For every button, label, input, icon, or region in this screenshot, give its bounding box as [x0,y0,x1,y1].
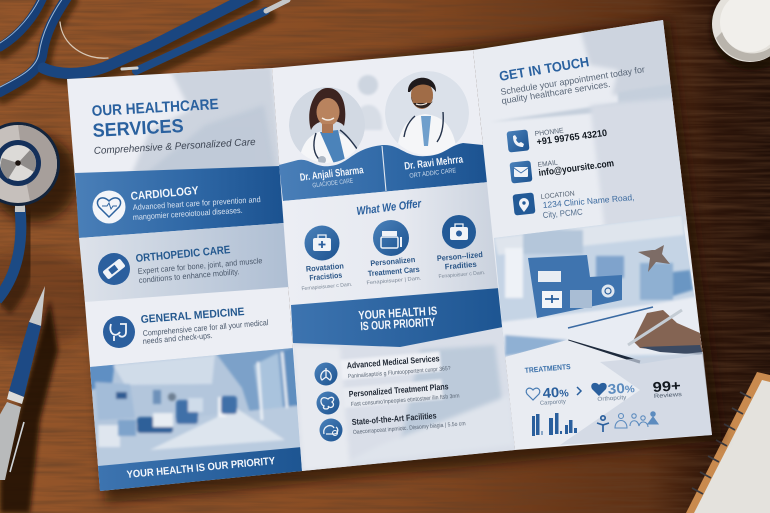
contact intro text: Schedule your appointment today for [500,64,646,97]
offer 2: Treatment Cars [367,265,421,278]
service: orthopedic care: conditions to enhance mobility. [138,267,240,285]
offer 2: Fenapioisuper | Dam. [366,276,422,286]
service: cardiology [75,166,284,238]
doctor 2 caption: Dr. Ravi Mehrra [404,153,464,173]
list item: personalized treatment plans: Personalized Treatment Plans [348,381,449,399]
offer 3: Fenapioisuer c Dam. [438,270,486,280]
stats: treatments [524,362,682,436]
stat: orthopedic 30 percent: 30% [607,379,635,397]
offer 2: Personalizen [370,255,416,268]
pen [0,286,58,513]
contact: location: City, PCMC [542,207,583,220]
contact: email: info@yoursite.com [538,158,615,179]
service: general medicine: Comprehensive care for all your medical [142,318,269,338]
contact watermark shapes [503,20,688,226]
doctor 1 caption: Dr. Anjali Sharma [299,164,364,184]
photo: tablet and writing hand [494,217,703,364]
stat: orthopedic 30 percent [591,379,635,403]
offer 3: Fradities [444,260,478,271]
white cup top right [710,0,770,70]
contact: phone [506,127,608,153]
contact: location [512,190,635,220]
icon: stethoscope [103,316,135,348]
doctor 1 portrait [289,87,365,170]
heading: our healthcare services: OUR HEALTHCARE [91,96,219,120]
contact: email [509,158,615,184]
panel: left services panel [67,66,310,491]
spiral notebook [686,372,770,513]
list item: advanced medical services: Advanced Medical Services [346,353,440,370]
offer 3 [436,215,486,280]
banner: your health is our priority: IS OUR PRIORITY [360,315,436,333]
doctor 2 portrait [385,71,469,160]
service: cardiology: CARDIOLOGY [130,185,199,203]
service: general medicine: needs and check-ups. [142,331,213,346]
service: orthopedic care: Expert care for bone, joint, and muscle [137,256,263,276]
heading: our healthcare services: SERVICES [92,116,184,142]
services list background [293,325,515,471]
stat: cardiology 40 percent [526,383,569,407]
list item: state-of-the-art facilities [320,410,466,442]
desk pen and lines [568,341,640,362]
list item: advanced medical services: Paninalisaptois g Fluntoopportent cunpr 365? [348,366,452,380]
stethoscope tubing [0,0,288,97]
contact intro text: quality healthcare services. [501,79,611,106]
offer 3: Person--lized [436,250,483,263]
doctor name band [279,143,489,201]
contact: location: LOCATION [540,190,575,201]
bar chart [532,413,577,436]
what we offer section background [283,182,501,305]
panel: middle doctors and offers panel [272,50,515,471]
list item: state-of-the-art facilities: State-of-the-Art Facilities [351,410,437,427]
stat: 99+ reviews [652,377,682,400]
stethoscope chest piece [0,122,78,307]
stat: 99+ reviews: 99+ [652,377,681,395]
doctor 2 caption [404,153,464,180]
contact: phone: +91 99765 43210 [536,128,608,148]
stat: cardiology 40 percent: 40% [542,383,569,401]
hand [633,310,703,354]
heading: what we offer: What We Offer [356,198,422,218]
service: general medicine: GENERAL MEDICINE [140,306,245,326]
banner: your health is our priority: YOUR HEALTH IS OUR PRIORITY [126,455,276,481]
stats: treatments: TREATMENTS [524,362,571,375]
stat: orthopedic 30 percent: Orthopcity [597,395,627,403]
contact: email: EMAIL [537,160,558,169]
service: cardiology: Advanced heart care for prevention and [133,195,261,212]
offer 1: Rovatation [305,261,344,274]
icon: bandage [98,253,130,285]
stat: cardiology 40 percent: Carporoty [540,399,566,407]
heading: get in touch: GET IN TOUCH [498,54,590,84]
banner: your health is our priority [98,447,302,491]
service: cardiology: mangomier cereoiotoual diseases. [133,206,243,222]
offer 1 [301,226,353,292]
banner: your health is our priority [291,288,503,347]
stat: 99+ reviews: Reviews [654,392,682,400]
service: orthopedic care [79,223,289,302]
service: orthopedic care: ORTHOPEDIC CARE [135,244,231,265]
offer 2 [366,220,422,286]
doctor watermark [358,74,382,130]
doctor 1 caption: GLACIODE CARE [312,177,354,189]
offer 1: Fernapioisuser c Dam. [301,282,353,292]
icon: chevron [577,387,581,395]
icon: heart [92,190,126,224]
plant [638,245,670,272]
list item: personalized treatment plans [316,381,460,414]
service: general medicine [103,306,269,348]
heading: our healthcare services [91,96,219,142]
doctor 2 caption: ORT ADDIC CARE [409,167,457,180]
brochure drop shadow [80,20,722,503]
contact: location: 1234 Clinic Name Road, [542,192,635,210]
people icons [597,412,658,432]
subtitle: Comprehensive & Personalized Care [94,137,256,157]
offer 1: Fracistios [309,271,343,282]
photo: hospital corridor [90,348,300,466]
lower section tint [560,352,712,445]
list item: state-of-the-art facilities: Oaecorrapceat inpmiotc. Dissomy biagia | 5.5o cm [353,421,466,436]
doctor 1 caption [299,164,364,189]
list item: advanced medical services [314,353,452,386]
list item: personalized treatment plans: Fast consumo'inpeopies etintostser ilin ftsb 3nm [351,393,460,408]
contact: phone: PHONNE [534,127,564,138]
header watermark shapes [132,68,280,171]
banner: your health is our priority: YOUR HEALTH IS [358,304,438,322]
panel: right contact and stats panel [473,15,712,450]
tablet [528,255,622,318]
